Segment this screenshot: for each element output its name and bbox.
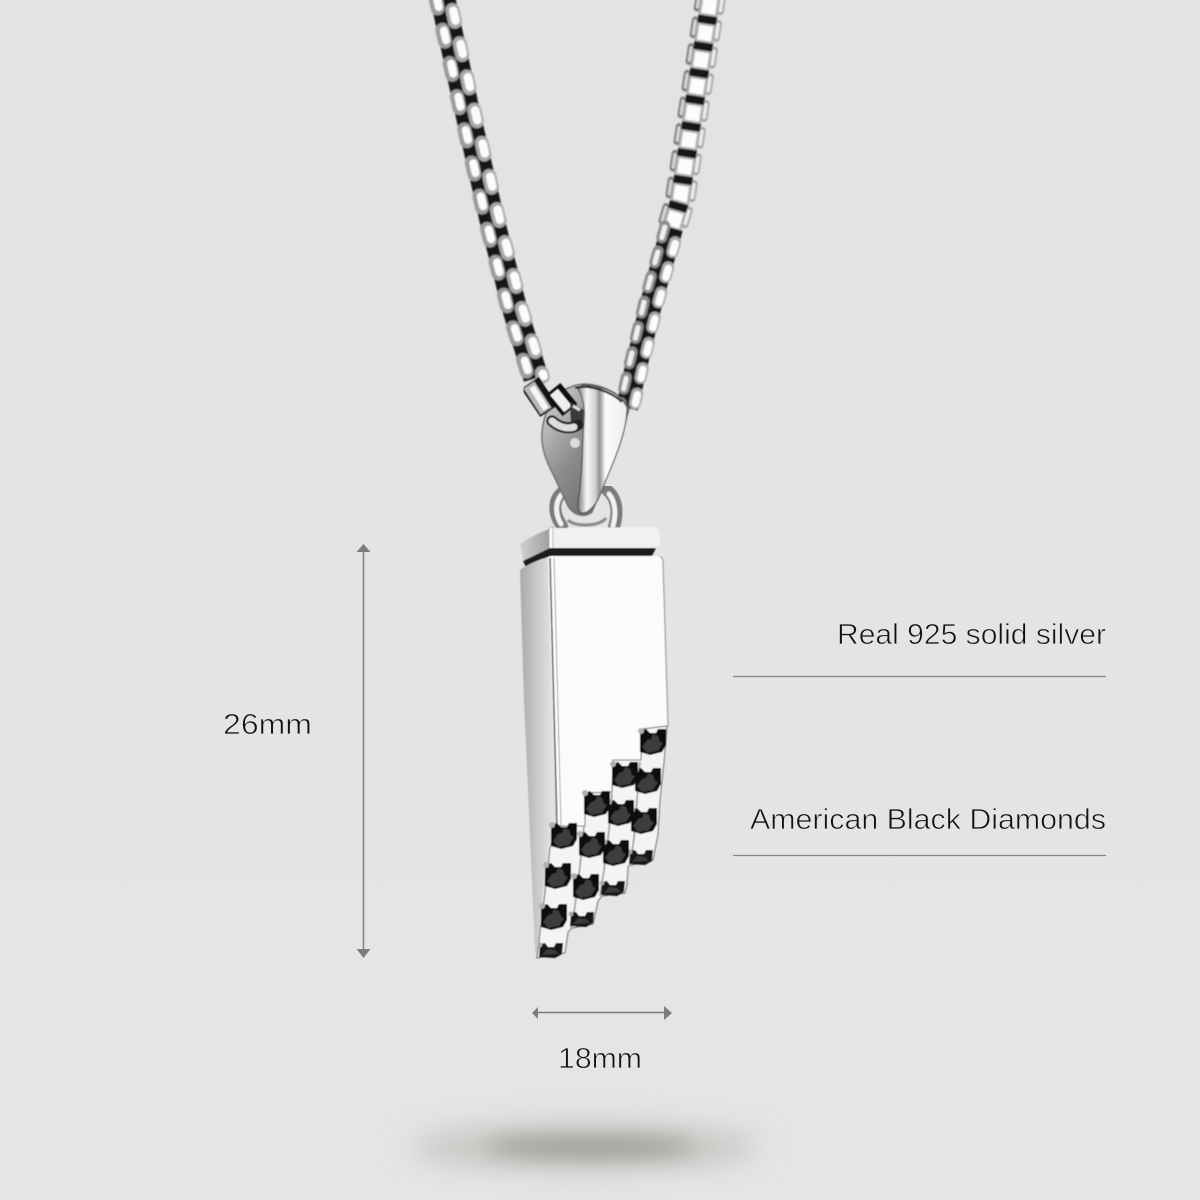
left chain (435, 0, 544, 380)
pendant cap (520, 527, 660, 567)
pendant front face (553, 556, 668, 827)
jump ring (555, 490, 616, 527)
bail front band (578, 385, 627, 513)
height label: 26mm (223, 709, 312, 741)
right chain (620, 0, 722, 410)
bail back (542, 384, 629, 515)
width label: 18mm (558, 1043, 642, 1075)
stepped gem tiles (537, 726, 667, 958)
pendant side face (520, 557, 561, 957)
pendant body (520, 527, 668, 958)
callout: diamonds: American Black Diamonds (750, 804, 1106, 836)
chain end links at bail (529, 383, 584, 448)
pendant bail (542, 384, 629, 515)
height dimension arrow (356, 544, 370, 958)
callout: silver: Real 925 solid silver (837, 619, 1106, 651)
pendant edge highlight (548, 556, 561, 828)
width dimension arrow (532, 1006, 672, 1020)
ground shadow (410, 1125, 760, 1169)
